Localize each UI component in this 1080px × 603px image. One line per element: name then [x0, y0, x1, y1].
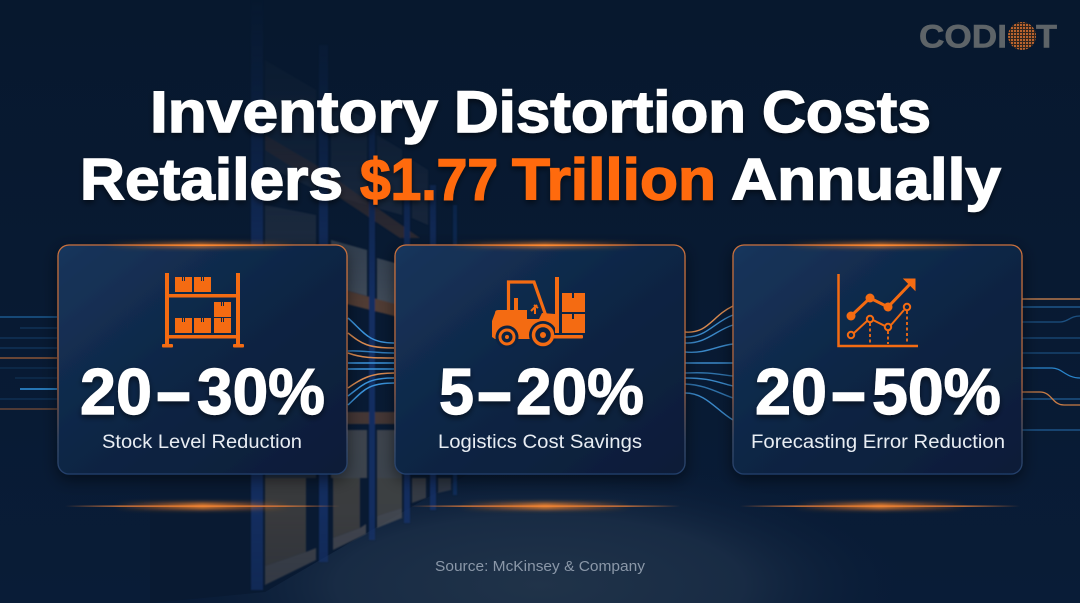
stat value: 30% — [197, 355, 325, 428]
stat value: 5 — [439, 355, 474, 428]
title line 1: Costs — [762, 80, 931, 145]
title line 1: Distortion — [454, 80, 746, 145]
icon: forklift with boxes — [492, 277, 585, 349]
stat label: Logistics Cost Savings — [438, 432, 642, 453]
warehouse boxes — [264, 137, 452, 566]
logo text left: CODI — [919, 18, 1007, 54]
warehouse photo background — [250, 64, 458, 590]
stat value: 20% — [516, 355, 644, 428]
logo text right: T — [1036, 18, 1057, 54]
warehouse floor — [150, 440, 950, 603]
connector lines between card 1 and card 2 — [348, 318, 394, 405]
card 2 top glow — [450, 243, 640, 247]
card 1 body — [58, 245, 347, 474]
left network lines — [0, 317, 57, 409]
stat value: 50% — [872, 355, 1001, 428]
stat label: Stock Level Reduction — [102, 432, 302, 453]
stat value: – — [478, 355, 511, 428]
title — [80, 80, 1001, 212]
stat value: 20 — [80, 355, 152, 428]
card 1 top glow — [105, 243, 295, 247]
title line 1: Inventory — [150, 80, 438, 145]
stat value: – — [832, 355, 865, 428]
title line 2: Retailers — [80, 148, 343, 212]
warehouse floor edge shadow — [150, 470, 475, 603]
title line 2: Trillion — [512, 148, 716, 212]
connector lines between card 2 and card 3 — [685, 306, 733, 420]
title line 2: $1.77 — [360, 148, 498, 212]
panel: logistics cost savings — [395, 243, 685, 474]
bottom glow line 2 — [410, 503, 680, 509]
logo — [919, 18, 1057, 54]
stat value: – — [157, 355, 190, 428]
card 2 body — [395, 245, 685, 474]
panel: stock level reduction — [58, 243, 347, 474]
stat value: 20 — [755, 355, 827, 428]
bottom glow line 3 — [740, 503, 1020, 509]
card 3 top glow — [785, 243, 975, 247]
icon: warehouse shelf with boxes — [162, 273, 244, 348]
source note: Source: McKinsey & Company — [435, 559, 646, 575]
icon: line chart with arrow — [838, 274, 918, 346]
logo dotted globe — [1008, 22, 1036, 50]
warehouse pallets and beams — [265, 135, 420, 585]
warehouse uprights — [250, 64, 458, 590]
title line 2: Annually — [731, 148, 1001, 212]
bottom glow line 1 — [65, 503, 340, 509]
right network lines — [1022, 299, 1080, 430]
stat label: Forecasting Error Reduction — [751, 432, 1005, 453]
panel: forecasting error reduction — [733, 243, 1022, 474]
card 3 body — [733, 245, 1022, 474]
